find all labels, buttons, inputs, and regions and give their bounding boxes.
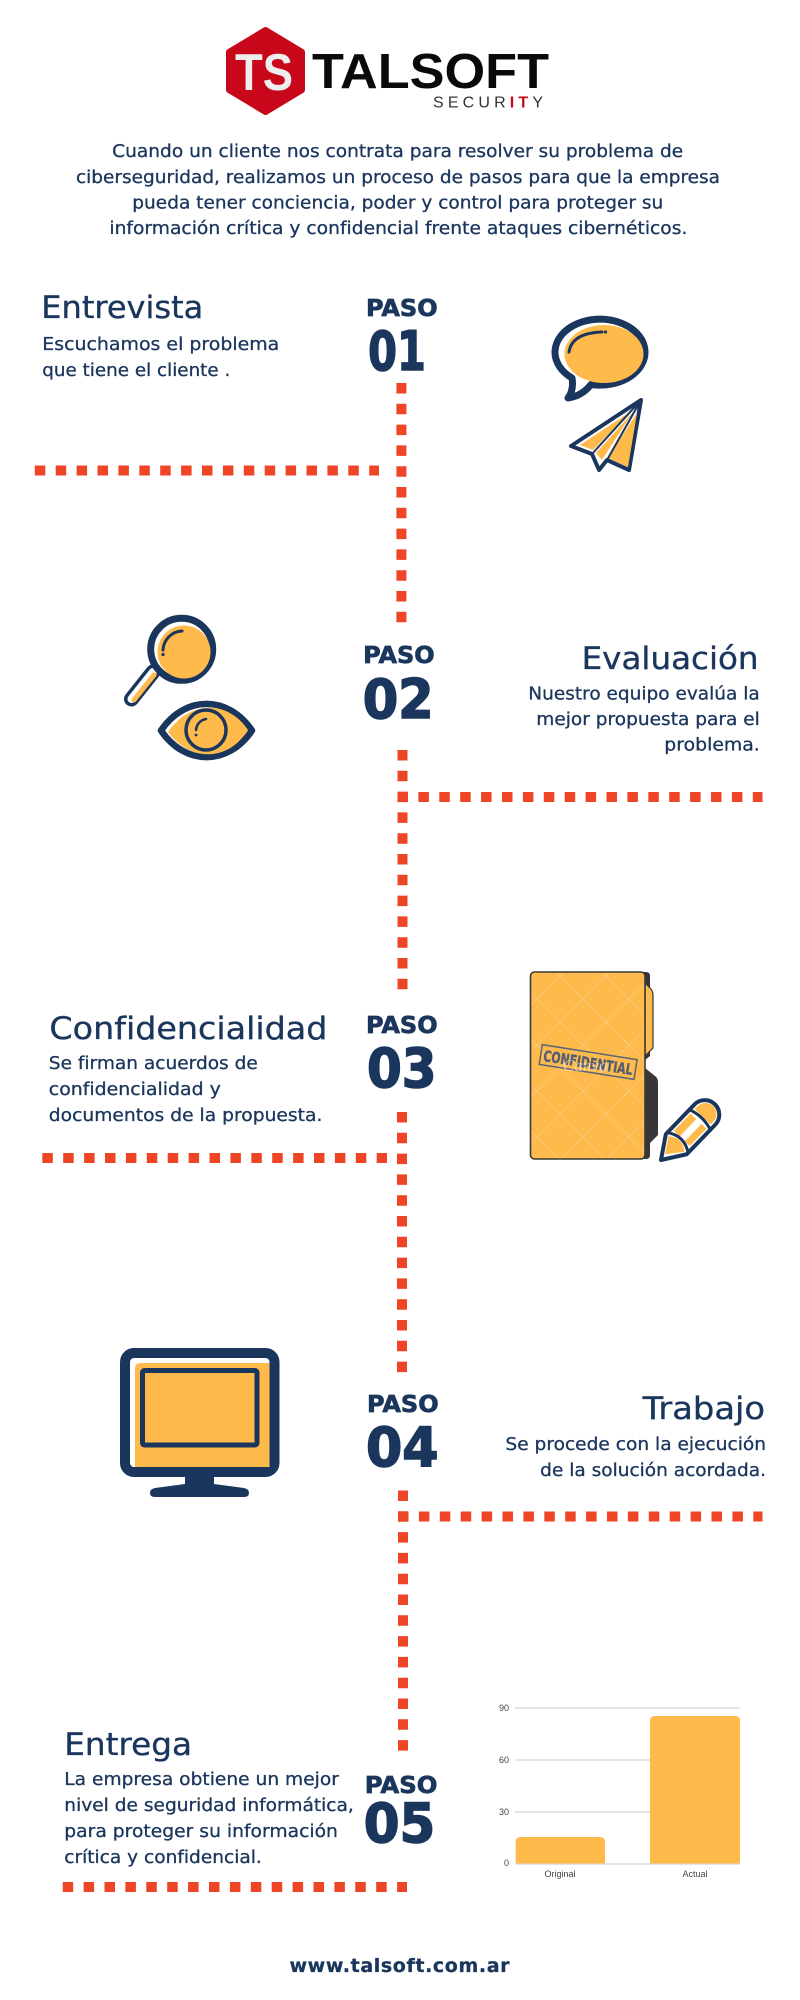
icon: pencil	[651, 1094, 725, 1170]
step 5 heading: Entrega: Entrega	[64, 1727, 192, 1763]
step 3 label: PASO 03: 03	[367, 1037, 437, 1100]
step 5 description: La empresa obtiene un mejor	[64, 1770, 340, 1790]
y axis labels: 0	[504, 1858, 509, 1868]
chart gridlines	[515, 1708, 740, 1864]
step 5 label: PASO 05: PASO	[365, 1773, 437, 1799]
step 5 label: PASO 05: 05	[364, 1792, 435, 1855]
intro text: pueda tener conciencia, poder y control para proteger su	[132, 194, 663, 214]
step 3 label: PASO 03	[366, 1013, 438, 1100]
step 4 label: PASO 04: 04	[366, 1416, 439, 1479]
y axis labels: 30	[499, 1807, 509, 1817]
step 3 description: documentos de la propuesta.	[49, 1106, 322, 1126]
connector: step 1 vertical	[396, 383, 406, 622]
step 4 description: de la solución acordada.	[540, 1461, 766, 1481]
step 1 label: PASO 01: 01	[368, 320, 426, 383]
folder stamp	[539, 1045, 637, 1079]
step 2 description	[528, 684, 760, 756]
step 2 description: mejor propuesta para el	[536, 710, 760, 730]
connector: step 4 horizontal	[398, 1512, 762, 1522]
y axis labels	[499, 1703, 509, 1868]
step 2 heading: Evaluación: Evaluación	[582, 641, 759, 677]
intro text: ciberseguridad, realizamos un proceso de pasos para que la empresa	[76, 168, 720, 188]
step 4 heading: Trabajo: Trabajo	[642, 1391, 765, 1427]
step 1 label: PASO 01: PASO	[366, 296, 438, 322]
icon: paper plane	[571, 400, 641, 470]
step 3 heading: Confidencialidad: Confidencialidad	[49, 1011, 327, 1047]
watermark: Canva	[563, 1056, 607, 1075]
step 2 label: PASO 02: 02	[363, 668, 434, 731]
icon: magnifier	[132, 618, 213, 700]
bar chart: Original vs Actual	[499, 1703, 740, 1879]
connector: step 3 vertical	[397, 1112, 407, 1372]
folder stamp: CONFIDENTIAL	[542, 1047, 634, 1079]
bar: Actual	[650, 1716, 740, 1864]
step 3 description	[49, 1054, 322, 1126]
step 2 label: PASO 02	[363, 643, 435, 731]
intro text	[76, 142, 720, 239]
connector: step 2 vertical	[398, 750, 408, 990]
icon: eye	[161, 704, 252, 757]
x axis labels	[544, 1869, 708, 1879]
connector: step 3 horizontal	[42, 1153, 387, 1163]
icon: confidential folder	[530, 972, 658, 1159]
y axis labels: 90	[499, 1703, 509, 1713]
intro text: Cuando un cliente nos contrata para resolver su problema de	[112, 142, 683, 162]
connector: step 1 horizontal	[35, 466, 379, 476]
icon: speech bubble	[555, 319, 645, 398]
step 4 description: Se procede con la ejecución	[505, 1435, 766, 1455]
icon: computer monitor	[125, 1353, 274, 1497]
step 1 description: que tiene el cliente .	[42, 361, 230, 381]
logo hexagon	[229, 30, 302, 112]
step 3 label: PASO 03: PASO	[366, 1013, 438, 1039]
x axis labels: Original	[544, 1869, 576, 1879]
logo wordmark: TALSOFT	[312, 45, 549, 99]
intro text: información crítica y confidencial frente ataques cibernéticos.	[109, 219, 687, 239]
step 1 description	[42, 335, 279, 381]
step 1 label: PASO 01	[366, 296, 438, 383]
y axis labels: 60	[499, 1755, 509, 1765]
step 3 description: Se firman acuerdos de	[49, 1054, 258, 1074]
step 2 description: problema.	[664, 736, 760, 756]
footer website: www.talsoft.com.ar	[290, 1955, 510, 1977]
step 5 description	[64, 1770, 354, 1868]
step 4 description	[505, 1435, 766, 1481]
logo monogram: TS	[235, 44, 293, 102]
connector: step 2 horizontal	[398, 792, 762, 802]
step 2 label: PASO 02: PASO	[363, 643, 435, 669]
connector: step 5 horizontal	[63, 1882, 407, 1892]
bar: Original	[516, 1837, 605, 1864]
step 1 heading: Entrevista: Entrevista	[41, 290, 203, 326]
step 3 description: confidencialidad y	[49, 1080, 221, 1100]
x axis labels: Actual	[682, 1869, 708, 1879]
step 2 description: Nuestro equipo evalúa la	[528, 684, 760, 704]
step 5 description: para proteger su información	[64, 1822, 338, 1842]
logo tagline: SECUR IT Y	[433, 94, 543, 112]
step 1 description: Escuchamos el problema	[42, 335, 279, 355]
step 5 description: nivel de seguridad informática,	[64, 1796, 354, 1816]
logo: Talsoft Security	[229, 30, 549, 112]
connector: step 4 vertical	[398, 1490, 408, 1751]
step 4 label: PASO 04: PASO	[367, 1392, 439, 1418]
step 5 description: crítica y confidencial.	[64, 1848, 262, 1868]
